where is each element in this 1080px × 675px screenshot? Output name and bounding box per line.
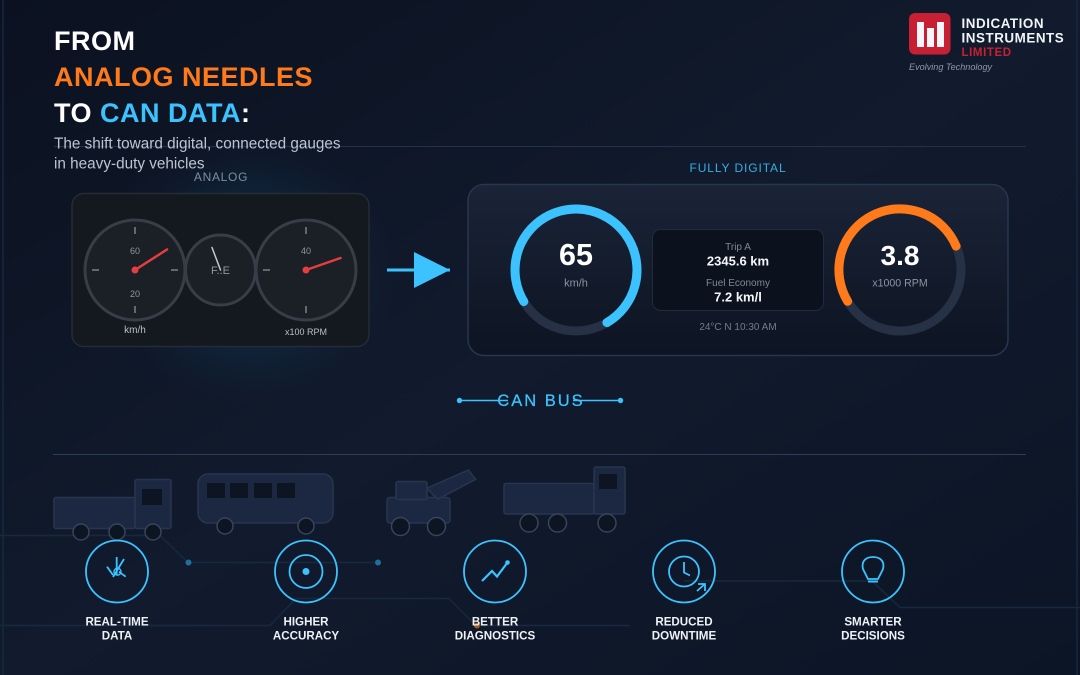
benefit: real-time data xyxy=(85,540,149,642)
CAN bus: CAN BUS xyxy=(497,392,585,410)
subtitle: The shift toward digital, connected gauges xyxy=(54,136,341,152)
benefit: smarter decisions xyxy=(841,540,905,642)
benefit: higher accuracy: ACCURACY xyxy=(273,630,339,642)
benefit: better diagnostics: BETTER xyxy=(472,616,519,628)
gauge: digital speed: 65 xyxy=(559,238,593,272)
gauge: digital speed: km/h xyxy=(564,278,588,290)
benefit: higher accuracy: HIGHER xyxy=(283,616,329,628)
logo: INSTRUMENTS xyxy=(962,30,1064,46)
gauge: speedometer: 20 xyxy=(130,289,140,299)
subtitle xyxy=(54,136,341,172)
gauge: fuel xyxy=(186,235,256,305)
title: TO CAN DATA: xyxy=(54,98,250,128)
benefit: better diagnostics xyxy=(455,540,536,642)
logo: INDICATION xyxy=(962,16,1044,31)
arrow: analog to digital xyxy=(387,252,450,288)
vehicle: truck xyxy=(54,480,171,540)
vehicle: bus xyxy=(198,474,333,534)
title: ANALOG NEEDLES xyxy=(54,62,313,92)
gauge: digital rpm: x1000 RPM xyxy=(872,278,928,290)
benefit: reduced downtime: REDUCED xyxy=(655,616,713,628)
label: analog: ANALOG xyxy=(194,170,248,184)
gauge: fuel: F..E xyxy=(211,265,230,277)
CAN bus xyxy=(457,392,623,410)
benefit: reduced downtime: DOWNTIME xyxy=(652,630,716,642)
gauge: speedometer xyxy=(85,220,185,336)
info box: Fuel Economy xyxy=(706,278,770,289)
subtitle: in heavy-duty vehicles xyxy=(54,156,205,172)
logo: Evolving Technology xyxy=(909,62,993,72)
status line: 24°C N 10:30 AM xyxy=(699,322,777,333)
benefit: better diagnostics: DIAGNOSTICS xyxy=(455,630,536,642)
panel: analog cluster xyxy=(72,194,369,346)
gauge: tachometer: x100 RPM xyxy=(285,327,327,337)
gauge: tachometer xyxy=(256,220,356,337)
benefit: smarter decisions: SMARTER xyxy=(844,616,902,628)
benefit: real-time data: DATA xyxy=(102,630,133,642)
vehicle: excavator xyxy=(387,470,476,536)
info box xyxy=(652,230,824,310)
gauge: digital rpm: 3.8 xyxy=(881,240,919,271)
benefit: real-time data: REAL-TIME xyxy=(85,616,149,628)
benefit: smarter decisions: DECISIONS xyxy=(841,630,905,642)
benefit: reduced downtime xyxy=(652,540,716,642)
info box: 2345.6 km xyxy=(707,254,769,268)
label: fully digital: FULLY DIGITAL xyxy=(689,161,787,175)
benefit: higher accuracy xyxy=(273,540,339,642)
vehicle: dump truck xyxy=(504,467,625,532)
gauge: tachometer: 40 xyxy=(301,246,311,256)
gauge: speedometer: km/h xyxy=(124,325,146,336)
info box: 7.2 km/l xyxy=(714,290,762,304)
panel: digital cluster xyxy=(468,184,1008,356)
logo: LIMITED xyxy=(962,47,1012,59)
logo xyxy=(909,13,1064,72)
title: FROM xyxy=(54,26,135,56)
gauge: speedometer: 60 xyxy=(130,246,140,256)
gauge: digital rpm xyxy=(839,209,961,331)
gauge: digital speed xyxy=(515,209,637,331)
title xyxy=(54,26,313,128)
info box: Trip A xyxy=(725,242,751,253)
